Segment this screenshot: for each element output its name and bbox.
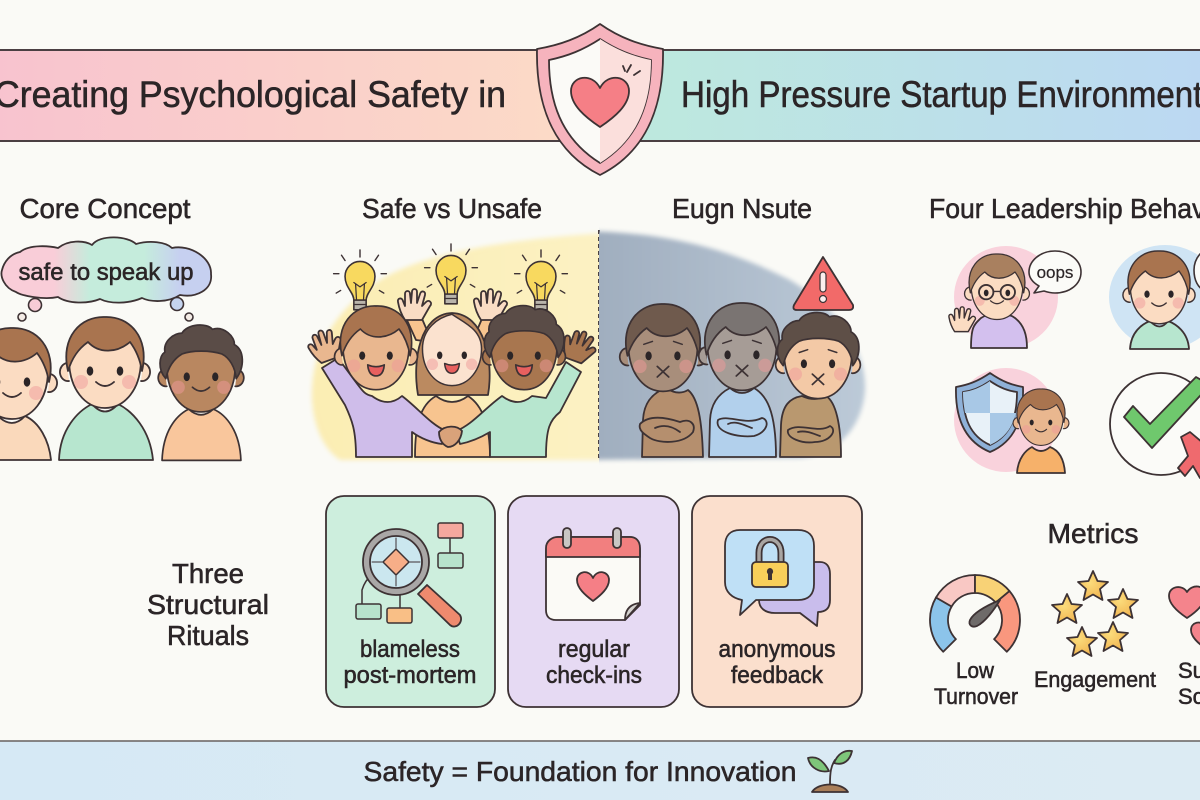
person: girl	[398, 289, 507, 457]
metric: survey scores	[1169, 586, 1200, 709]
card: blameless post-mortem: post-mortem	[344, 662, 476, 689]
handshake	[439, 427, 462, 447]
card: regular check-ins: check-ins	[546, 662, 642, 689]
divider: dashed line	[598, 230, 600, 460]
person: boy in mint	[456, 306, 600, 457]
behaviour: protect team	[954, 368, 1069, 473]
person: left	[0, 328, 57, 460]
card: regular check-ins	[508, 496, 679, 707]
heading: three structural rituals: Structural	[147, 589, 269, 620]
title left part: Creating Psychological Safety in	[0, 74, 506, 115]
heading: three structural rituals: Rituals	[167, 620, 249, 651]
panel: leadership behaviours	[949, 245, 1200, 478]
icon: idea bulb 1	[334, 250, 386, 310]
title banner	[0, 50, 1200, 141]
speech bubble oops: oops	[1037, 263, 1073, 282]
cloud text: safe to speak up	[18, 259, 194, 286]
metric label: Low	[956, 658, 994, 683]
card: blameless post-mortem	[326, 496, 495, 707]
person: right	[158, 325, 244, 460]
person: middle	[59, 317, 153, 460]
metric label: Engagement	[1034, 667, 1156, 692]
metric: engagement	[1034, 571, 1156, 692]
person: unsafe middle	[699, 303, 785, 457]
heading: safe vs unsafe: Safe vs Unsafe	[362, 193, 542, 224]
heading: three structural rituals	[147, 558, 269, 651]
icon: idea bulb 2	[425, 244, 477, 304]
icon: idea bulb 3	[515, 250, 567, 310]
footer banner	[0, 741, 1200, 800]
footer text: Safety = Foundation for Innovation	[364, 756, 796, 787]
behaviour: accountability check and cross	[1110, 373, 1200, 478]
panel: core concept illustration	[0, 237, 244, 460]
behaviour: admit mistakes	[949, 246, 1081, 348]
heading: garbled unsafe label: Eugn Nsute	[672, 193, 812, 224]
card: anonymous feedback: feedback	[731, 662, 824, 689]
card label: anonymous	[718, 636, 836, 663]
panel: unsafe team	[580, 231, 865, 460]
card label: blameless	[360, 636, 460, 663]
person: unsafe right	[776, 313, 860, 457]
icon: shield with heart	[537, 24, 663, 175]
heading: three structural rituals: Three	[172, 558, 244, 589]
card: anonymous feedback	[692, 496, 862, 707]
behaviour: invite input	[1109, 245, 1200, 349]
card label: regular	[558, 636, 630, 663]
icon: magnifier with flowchart	[356, 523, 463, 627]
yellow glow background	[312, 232, 620, 460]
chart: gauge	[930, 575, 1020, 652]
icon: locked speech bubbles	[725, 530, 830, 626]
panel: safe team	[304, 232, 620, 460]
person: unsafe left	[620, 304, 706, 457]
heading: metrics: Metrics	[1048, 518, 1138, 549]
person: boy in purple	[304, 306, 446, 457]
metric: low turnover: Turnover	[934, 684, 1018, 709]
heading: core concept: Core Concept	[20, 193, 191, 224]
icon: warning triangle	[793, 257, 853, 310]
icon: hearts	[1169, 586, 1200, 648]
grey cloud background	[580, 231, 865, 460]
icon: calendar with heart	[546, 528, 640, 620]
thought cloud	[2, 237, 211, 321]
metric: low turnover	[930, 575, 1020, 709]
icon: sprout	[808, 751, 852, 792]
icon: five stars	[1052, 571, 1138, 656]
